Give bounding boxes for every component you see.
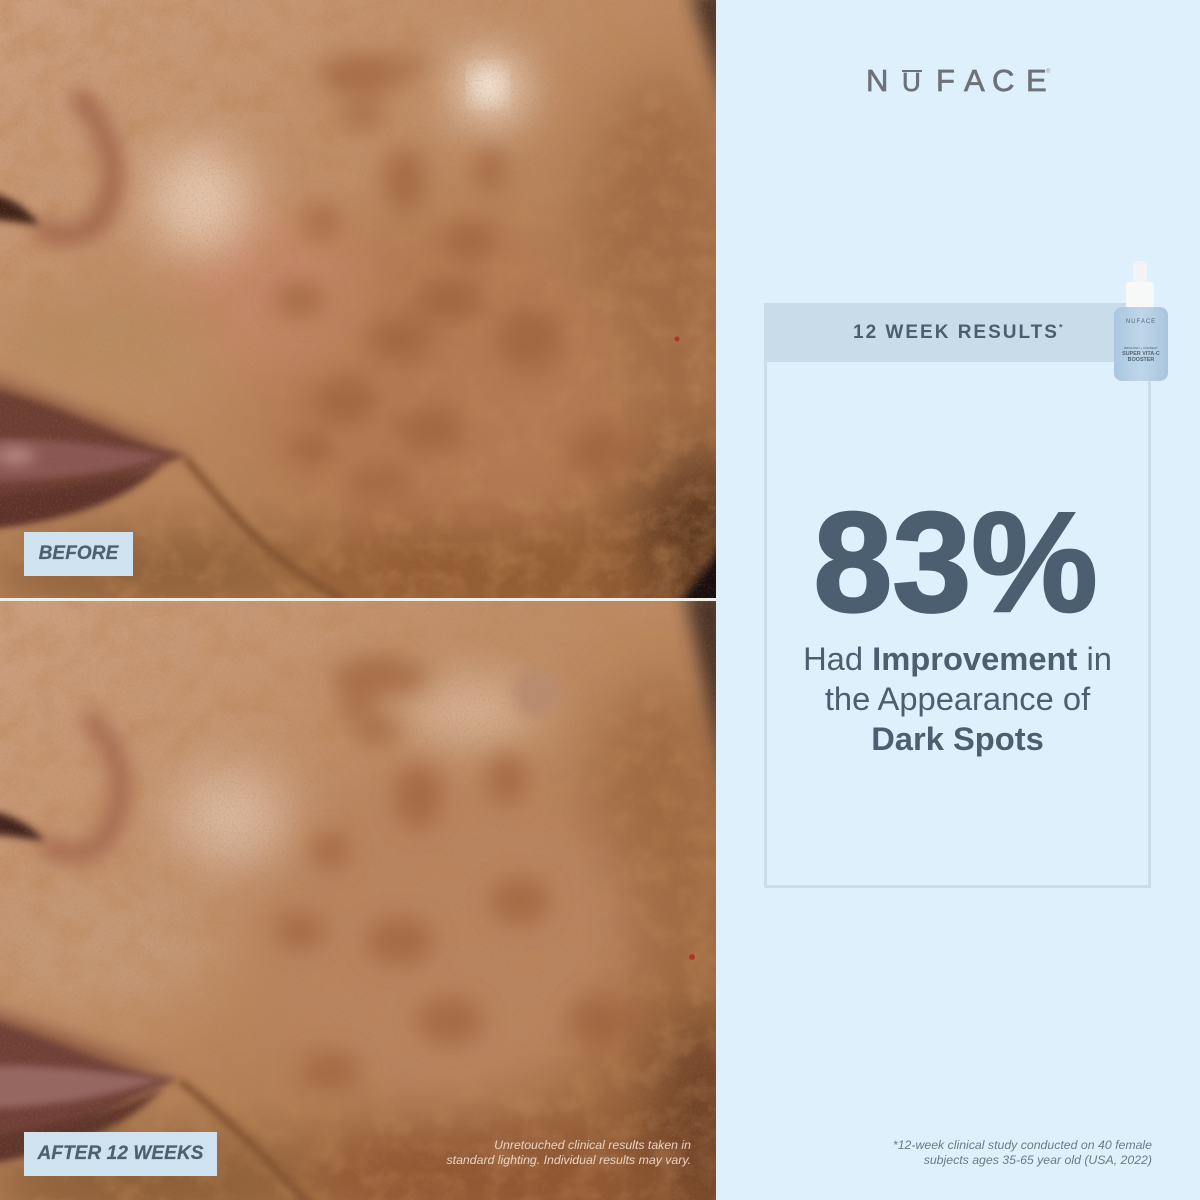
- label: before: BEFORE: [39, 543, 118, 564]
- study footnote: [893, 1138, 1152, 1166]
- logo: A: [964, 63, 985, 98]
- statistic description: [803, 640, 1112, 757]
- logo: N: [866, 63, 888, 98]
- study footnote: *12-week clinical study conducted on 40 female: [893, 1138, 1152, 1152]
- photo: before: [0, 0, 716, 598]
- nose edge: [44, 716, 120, 853]
- statistic description: Dark Spots: [871, 720, 1044, 757]
- icon: serum bottle: [1114, 261, 1168, 381]
- statistic description: the Appearance of: [825, 680, 1090, 717]
- statistic description: Had Improvement in: [803, 640, 1112, 677]
- panel frame: [764, 303, 1151, 888]
- divider: [0, 598, 716, 601]
- main statistic: 83%: [813, 483, 1098, 642]
- icon: serum bottle: SUPER VITA-C: [1122, 351, 1160, 357]
- results panel: [764, 303, 1151, 888]
- logo: C: [992, 63, 1014, 98]
- panel header: [764, 303, 1151, 362]
- icon: serum bottle: NUFACE: [1126, 319, 1156, 325]
- icon: serum bottle: BRIGHTEN + CORRECT: [1124, 346, 1158, 350]
- photo: after 12 weeks: [0, 601, 716, 1200]
- logo: ®: [1046, 69, 1050, 75]
- logo: [866, 63, 1050, 98]
- study footnote: subjects ages 35-65 year old (USA, 2022): [924, 1152, 1152, 1166]
- photo disclaimer: Unretouched clinical results taken in: [494, 1138, 691, 1152]
- photo disclaimer: [446, 1138, 691, 1166]
- nose edge: [38, 95, 113, 235]
- icon: serum bottle: BOOSTER: [1128, 357, 1154, 363]
- label: after 12 weeks: AFTER 12 WEEKS: [37, 1143, 204, 1164]
- logo: F: [936, 63, 955, 98]
- photo disclaimer: standard lighting. Individual results may vary.: [447, 1152, 691, 1166]
- label: after 12 weeks: [24, 1132, 217, 1176]
- logo: U: [902, 67, 921, 97]
- logo: E: [1026, 63, 1047, 98]
- panel header: 12 WEEK RESULTS*: [853, 322, 1062, 343]
- label: before: [24, 532, 133, 576]
